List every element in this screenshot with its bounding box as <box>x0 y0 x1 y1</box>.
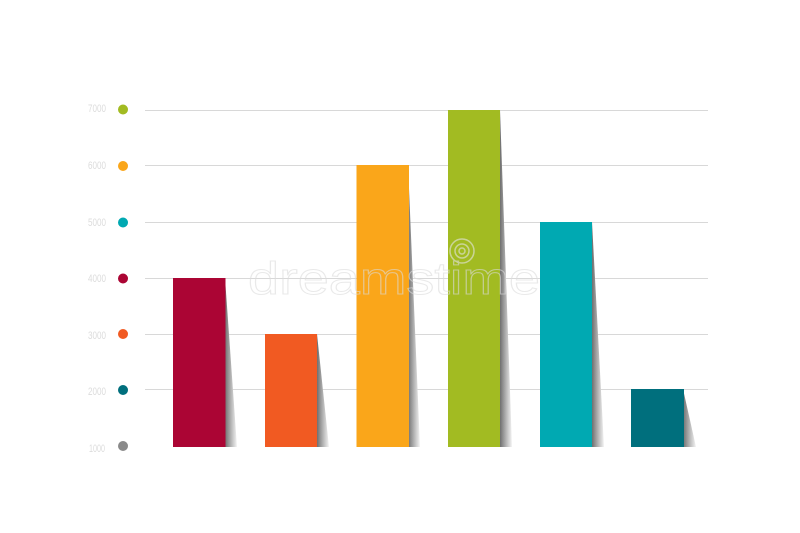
bar shadows <box>225 110 696 447</box>
y axis labels: 6000 <box>88 160 106 172</box>
bars <box>173 110 684 447</box>
y axis labels: 4000 <box>88 273 106 285</box>
y axis labels: 1000 <box>89 443 105 455</box>
legend dots <box>118 104 128 451</box>
watermark: dreamstime <box>248 253 540 304</box>
y axis labels: 5000 <box>88 217 106 229</box>
y axis labels: 7000 <box>88 103 106 115</box>
y axis labels <box>88 103 106 455</box>
grid lines <box>145 110 708 390</box>
y axis labels: 2000 <box>88 386 106 398</box>
watermark <box>248 239 540 304</box>
y axis labels: 3000 <box>88 330 106 342</box>
